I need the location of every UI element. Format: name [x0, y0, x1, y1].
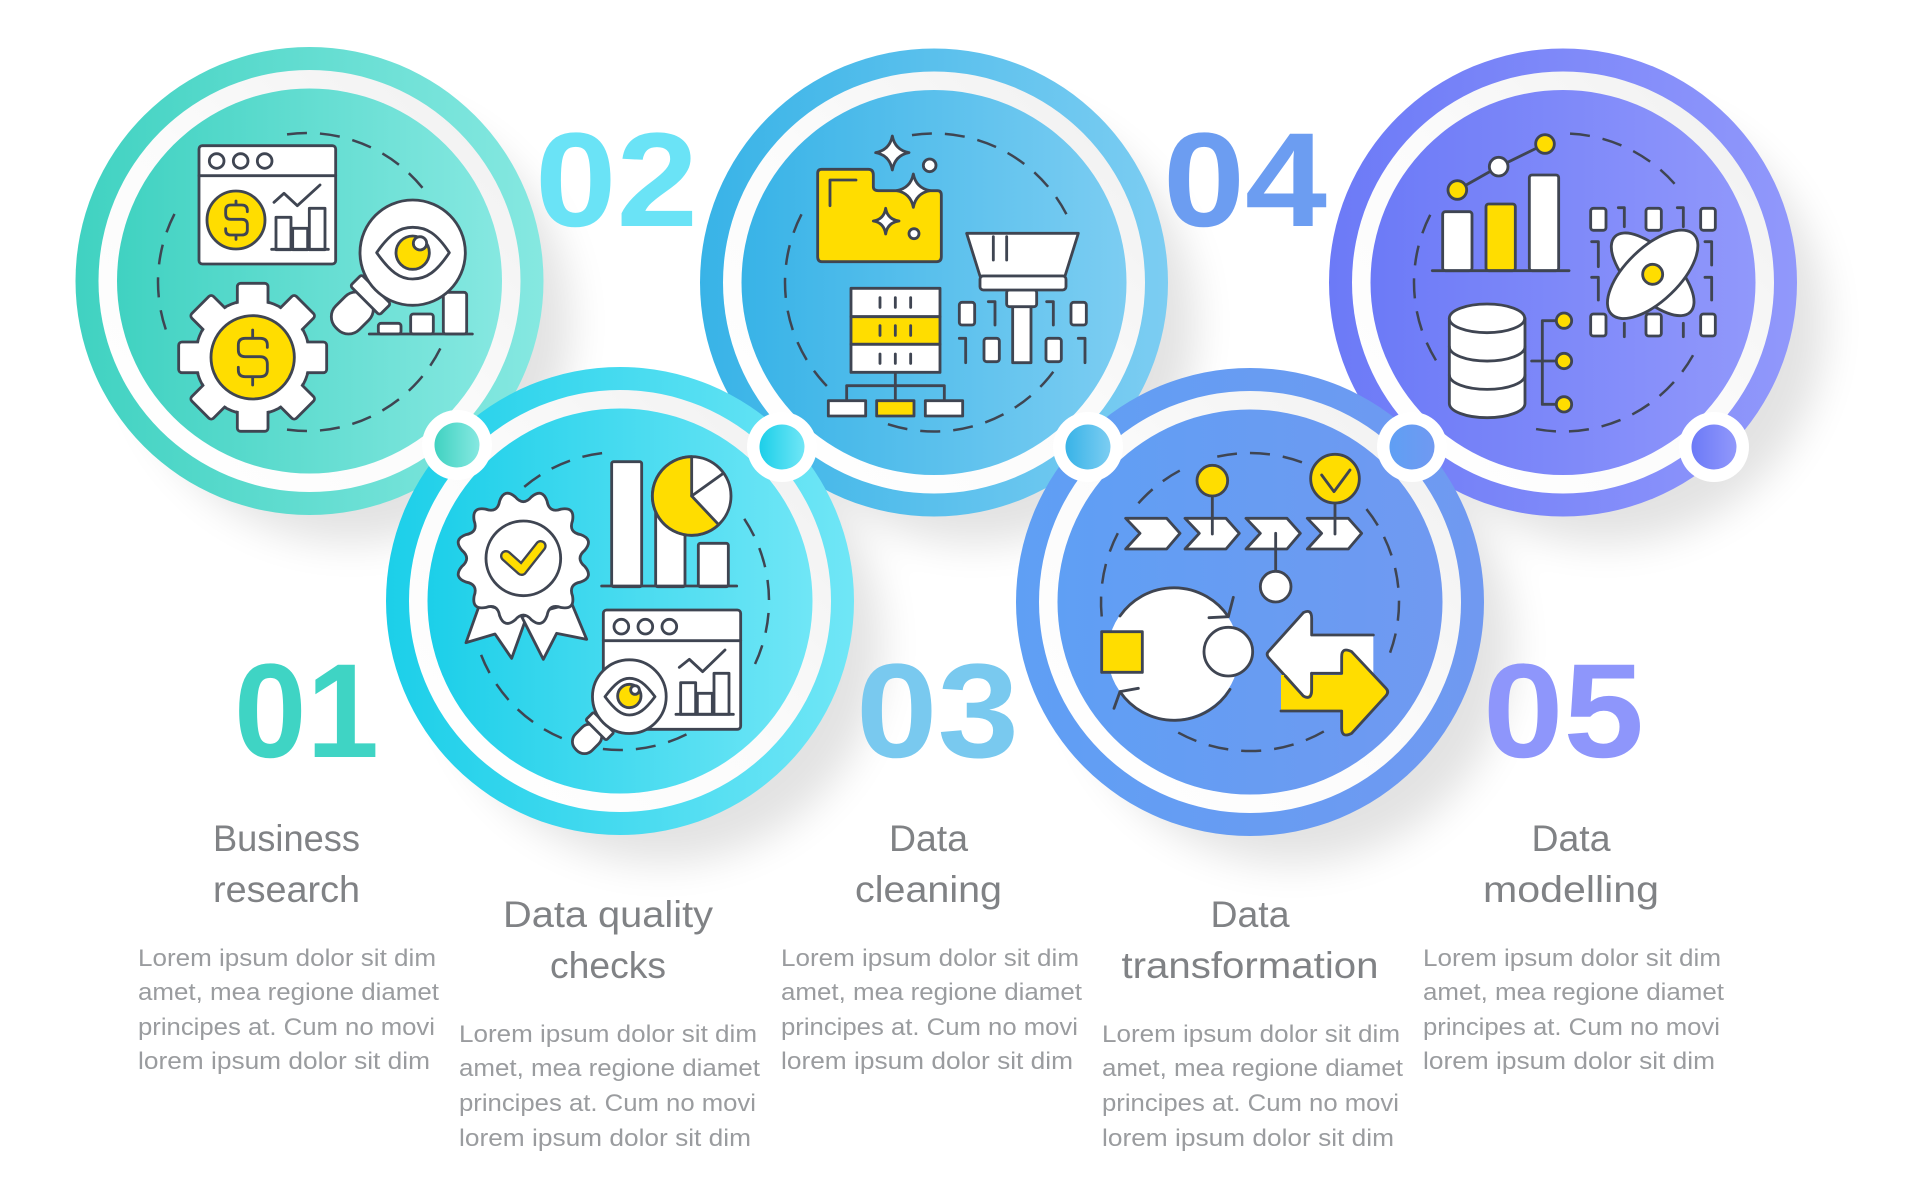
step 5 heading: modelling	[1483, 869, 1659, 910]
step 3 heading: Data	[889, 818, 968, 859]
step 5 body text: amet, mea regione diamet	[1423, 979, 1724, 1006]
dashed ring 1	[107, 82, 507, 482]
step 5 body text: Lorem ipsum dolor sit dim	[1423, 945, 1721, 972]
step 4 body text: principes at. Cum no movi	[1102, 1090, 1399, 1117]
panel: step 3 circle	[700, 48, 1168, 516]
drop shadows	[131, 103, 1825, 864]
step 4 body text: lorem ipsum dolor sit dim	[1102, 1125, 1394, 1152]
connector dot 3	[1053, 412, 1123, 482]
icon: small bar chart	[369, 292, 472, 334]
connector dot 5	[1679, 412, 1749, 482]
step 2 heading: Data quality	[503, 894, 714, 935]
step 4 heading	[1122, 894, 1378, 986]
icon: data modelling	[1432, 135, 1715, 418]
icon: dashboard window	[199, 146, 336, 264]
number 04: 04	[1163, 106, 1327, 255]
step 5 body text: lorem ipsum dolor sit dim	[1423, 1048, 1715, 1075]
step 2 heading: checks	[550, 945, 666, 986]
step 5 body text: principes at. Cum no movi	[1423, 1014, 1720, 1041]
step 5 heading: Data	[1532, 818, 1611, 859]
number 01: 01	[234, 637, 379, 786]
step 1 heading	[213, 818, 360, 910]
step 3 body text: lorem ipsum dolor sit dim	[781, 1048, 1073, 1075]
step 3 body text: principes at. Cum no movi	[781, 1014, 1078, 1041]
step 2 body text: amet, mea regione diamet	[459, 1055, 760, 1082]
connector dot 1	[422, 410, 492, 480]
icon: bars and pie chart	[602, 457, 737, 587]
panel: step 4 circle	[1016, 368, 1484, 836]
step 3 heading	[855, 818, 1002, 910]
step 1 body text: Lorem ipsum dolor sit dim	[138, 945, 436, 972]
icon: data cleaning	[818, 136, 1086, 416]
dashed ring 3	[723, 72, 1145, 493]
step 4 heading: Data	[1210, 894, 1290, 935]
step 4 body text	[1102, 1021, 1403, 1152]
icon: broom over binary	[959, 233, 1086, 363]
dashed ring 2	[410, 391, 830, 811]
connector dot 4	[1377, 412, 1447, 482]
step 1 body text: lorem ipsum dolor sit dim	[138, 1048, 430, 1075]
dashed ring 4	[1040, 392, 1460, 812]
icon: data transformation	[1102, 454, 1388, 735]
icon: dollar gear	[179, 283, 327, 431]
step 1 heading: research	[213, 869, 360, 910]
step 2 body text: principes at. Cum no movi	[459, 1090, 756, 1117]
panel: step 1 circle	[76, 47, 544, 515]
icon: quality badge	[458, 493, 588, 659]
icon: database tree	[1449, 304, 1572, 418]
step 3 heading: cleaning	[855, 869, 1002, 910]
number 03: 03	[856, 637, 1019, 786]
icon: atom with binary	[1591, 208, 1715, 337]
step 2 body text: lorem ipsum dolor sit dim	[459, 1125, 751, 1152]
panel: step 5 circle	[1329, 48, 1797, 516]
step 1 body text: amet, mea regione diamet	[138, 979, 439, 1006]
icon: circular conversion	[1102, 588, 1253, 720]
step 2 body text: Lorem ipsum dolor sit dim	[459, 1021, 757, 1048]
step 4 heading: transformation	[1122, 945, 1378, 986]
icon: magnifier with eye	[300, 178, 487, 366]
step 2 heading	[503, 894, 714, 986]
panel: step 2 circle	[386, 367, 854, 835]
step 2 body text	[459, 1021, 760, 1152]
step 1 heading: Business	[213, 818, 360, 859]
step 1 body text	[138, 945, 439, 1075]
icon: server stack	[828, 288, 963, 416]
step 3 body text	[781, 945, 1082, 1075]
step 1 body text: principes at. Cum no movi	[138, 1014, 435, 1041]
icon: bar and line chart	[1432, 135, 1569, 271]
icon: sparkling folder	[818, 136, 941, 262]
step 4 body text: Lorem ipsum dolor sit dim	[1102, 1021, 1400, 1048]
step 4 body text: amet, mea regione diamet	[1102, 1055, 1403, 1082]
number 02: 02	[535, 106, 698, 255]
icon: swap arrows	[1267, 611, 1388, 735]
icon: business research	[179, 146, 487, 431]
connector dot 2	[747, 412, 817, 482]
step 3 body text: amet, mea regione diamet	[781, 979, 1082, 1006]
step 5 heading	[1483, 818, 1659, 910]
icon: inspection window	[550, 610, 741, 776]
step 5 body text	[1423, 945, 1724, 1075]
icon: process chevrons with pins	[1126, 454, 1362, 602]
number 05: 05	[1483, 637, 1644, 786]
step 3 body text: Lorem ipsum dolor sit dim	[781, 945, 1079, 972]
dashed ring 5	[1358, 78, 1768, 487]
icon: data quality checks	[458, 457, 741, 776]
